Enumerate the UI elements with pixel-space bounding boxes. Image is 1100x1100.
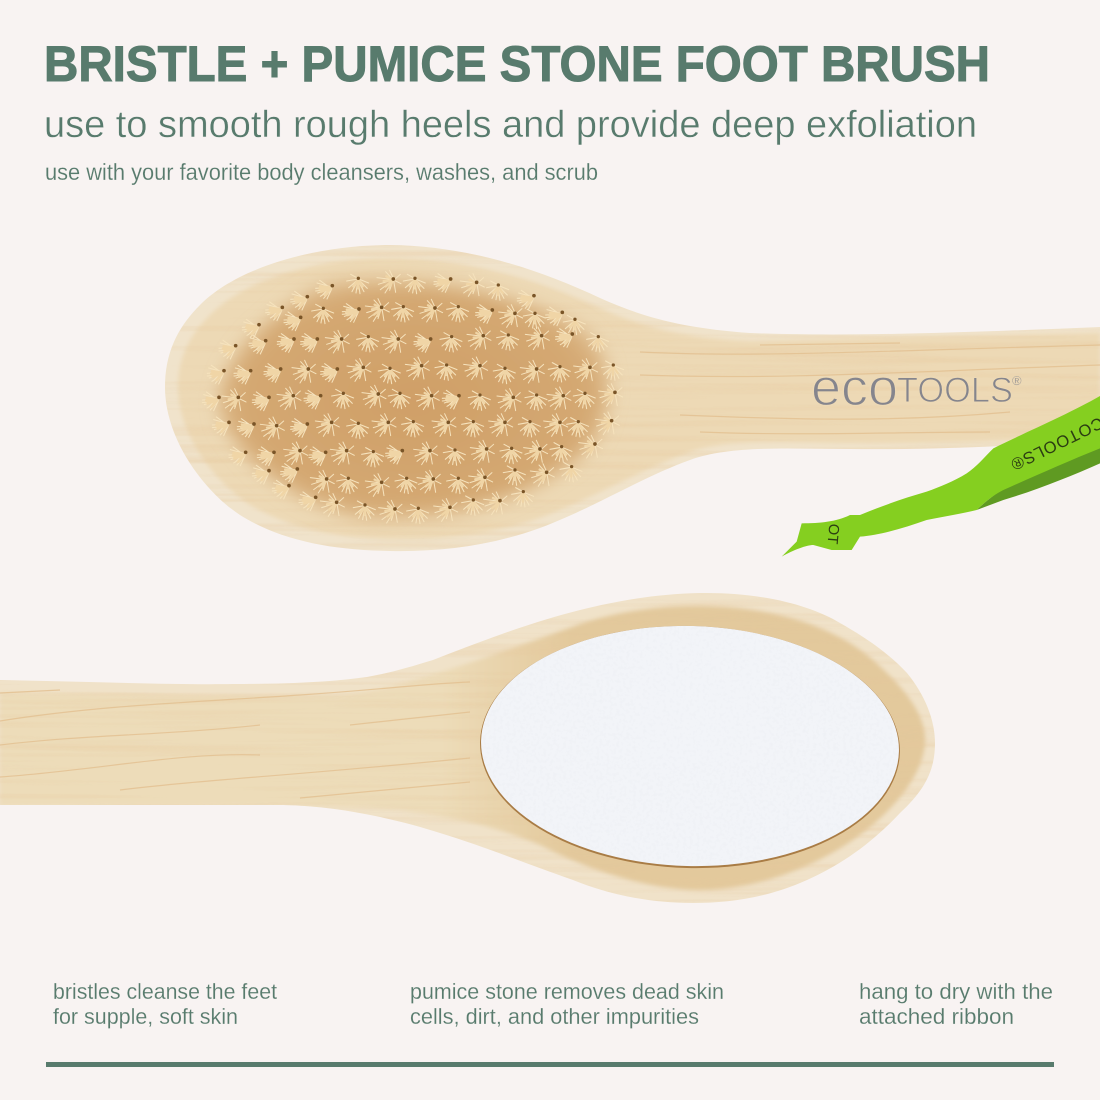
title: BRISTLE + PUMICE STONE FOOT BRUSH [44, 36, 990, 92]
handle streaks [640, 343, 1100, 434]
usage note: use with your favorite body cleansers, washes, and scrub [45, 159, 598, 185]
head and handle face [0, 606, 925, 890]
logo: ecotools: TOOLS [897, 371, 1013, 410]
head and handle face [178, 258, 1100, 539]
subtitle: use to smooth rough heels and provide deep exfoliation [44, 104, 977, 146]
wooden body [165, 245, 1100, 551]
caption: pumice: pumice stone removes dead skin [410, 979, 724, 1004]
ribbon [782, 396, 1100, 557]
caption: bristles: bristles cleanse the feet [53, 979, 277, 1004]
caption: ribbon: hang to dry with the [859, 979, 1053, 1004]
pumice recess [477, 621, 903, 873]
pumice texture [478, 622, 902, 870]
ribbon knot text: OT [824, 523, 841, 545]
caption: ribbon: attached ribbon [859, 1004, 1014, 1029]
logo: ecotools: ® [1012, 373, 1022, 388]
caption: pumice: cells, dirt, and other impurities [410, 1004, 699, 1029]
brush: bristle side [160, 240, 1100, 560]
logo: ecotools [811, 359, 1022, 417]
ribbon underside [977, 445, 1100, 510]
ribbon face [782, 396, 1100, 557]
brush: pumice side [0, 590, 940, 905]
bristle bed [220, 280, 609, 518]
bristle tufts [202, 270, 624, 524]
wood grain [160, 240, 1100, 560]
logo: ecotools: eco [811, 359, 898, 417]
pumice stone [478, 621, 902, 871]
wood grain [0, 614, 935, 894]
wooden body [0, 593, 935, 903]
handle streaks [0, 682, 470, 798]
caption: bristles: for supple, soft skin [53, 1004, 238, 1029]
